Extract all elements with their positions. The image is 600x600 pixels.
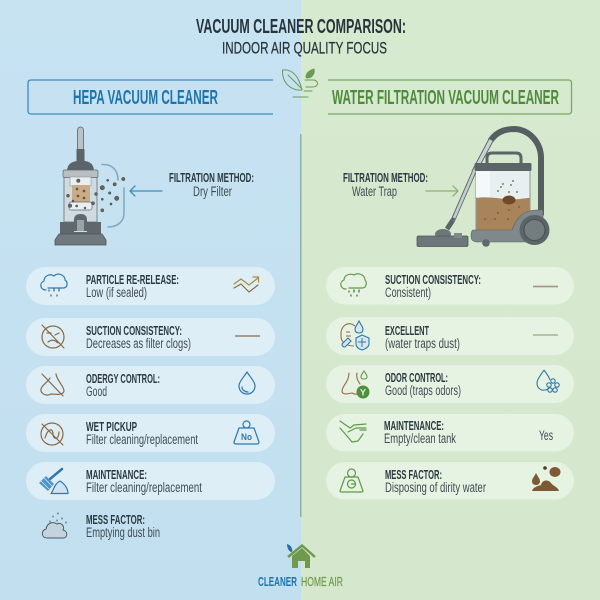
row: water mess factor: MESS FACTOR:	[385, 467, 442, 482]
icon: green dash	[533, 334, 558, 336]
row: HEPA maintenance	[26, 462, 275, 500]
row: water excellent dust capture: (water traps dust)	[385, 336, 460, 351]
icon: green rain cloud	[341, 274, 366, 296]
icon: crossed-out face	[42, 325, 64, 348]
illustration: water filtration canister vacuum	[417, 129, 550, 247]
icon: water drop	[239, 372, 255, 394]
icon: nose with Y badge	[342, 371, 370, 398]
label: HEPA filtration method: Dry Filter	[193, 184, 232, 199]
icon: brush and dustpan	[39, 469, 68, 494]
icon: weight marked No: No	[241, 432, 252, 443]
row: water maintenance: Empty/clean tank	[384, 431, 456, 446]
row: HEPA maintenance: Filter cleaning/replacement	[86, 480, 202, 495]
footer: Cleaner Home Air logo: CLEANER	[258, 574, 297, 589]
row: HEPA wet pickup: Filter cleaning/replacement	[86, 432, 198, 447]
row: HEPA wet pickup	[26, 414, 275, 452]
label: yes: Yes	[539, 428, 553, 443]
icon: face with drop and shield	[341, 321, 369, 350]
row: HEPA suction consistency: Decreases as filter clogs)	[86, 336, 191, 351]
icon: handshake	[340, 421, 366, 442]
row: water mess factor: Disposing of dirity water	[385, 480, 486, 495]
icon: dust cloud	[42, 513, 67, 538]
row: water odor control: ODOR CONTROL:	[385, 370, 448, 385]
icon: house with leaf	[287, 544, 315, 568]
icon: crossed-out nose	[41, 374, 64, 396]
row: HEPA odor control: ODERGY CONTROL:	[86, 371, 160, 386]
heading: HEPA vacuum cleaner: HEPA VACUUM CLEANER	[73, 87, 218, 109]
title	[196, 16, 406, 58]
icon: nose with Y badge: Y	[360, 388, 366, 398]
row: HEPA odor control	[26, 366, 275, 404]
row: HEPA wet pickup: WET PICKUP	[86, 419, 137, 434]
panel: right background	[301, 0, 600, 600]
row: HEPA suction consistency: SUCTION CONSISTENCY:	[86, 323, 182, 338]
icon: central leaf and wind logo	[282, 69, 318, 97]
arrow: HEPA filtration	[130, 186, 162, 196]
row: HEPA mess factor: Emptying dust bin	[86, 525, 160, 540]
row: water suction consistency: SUCTION CONSISTENCY:	[385, 272, 481, 287]
title: INDOOR AIR QUALITY FOCUS	[222, 38, 387, 58]
illustration: HEPA upright vacuum	[55, 127, 125, 245]
icon: trend arrow	[234, 277, 258, 292]
heading: HEPA vacuum cleaner	[28, 80, 273, 114]
label: water filtration method: FILTRATION METHOD:	[343, 170, 428, 185]
title: VACUUM CLEANER COMPARISON:	[196, 16, 406, 38]
row: HEPA particle re-release: PARTICLE RE-RELEASE:	[86, 272, 179, 287]
heading: water filtration vacuum cleaner	[328, 80, 572, 114]
icon: weight marked No	[234, 421, 259, 444]
row: water odor control	[326, 365, 574, 403]
row: water excellent dust capture: EXCELLENT	[385, 323, 429, 338]
row: HEPA mess factor: MESS FACTOR:	[86, 512, 145, 527]
icon: crossed-out wave	[41, 423, 63, 445]
footer: Cleaner Home Air logo	[258, 544, 343, 589]
panel: left background	[0, 0, 301, 600]
row: water excellent dust capture	[326, 317, 574, 355]
icon: drop with flower	[537, 370, 559, 392]
row: HEPA suction consistency	[26, 318, 275, 356]
footer: Cleaner Home Air logo: HOME AIR	[301, 574, 343, 589]
label: water filtration method	[343, 170, 428, 199]
row: HEPA mess factor	[42, 512, 160, 540]
label: HEPA filtration method: FILTRATION METHOD:	[169, 170, 254, 185]
row: HEPA maintenance: MAINTENANCE:	[86, 467, 147, 482]
icon: brown dash	[533, 286, 558, 288]
row: water mess factor	[326, 462, 574, 500]
row: HEPA particle re-release	[26, 267, 275, 305]
icon: dirt pile	[532, 466, 560, 491]
row: water maintenance: MAINTENANCE:	[384, 418, 444, 433]
row: water suction consistency: Consistent)	[385, 285, 431, 300]
row: water odor control: Good (traps odors)	[385, 383, 461, 398]
row: HEPA particle re-release: Low (if sealed)	[86, 285, 147, 300]
row: HEPA odor control: Good	[86, 384, 107, 399]
row: water maintenance	[326, 414, 574, 452]
icon: rain cloud	[41, 274, 67, 296]
icon: green weight with clock	[340, 469, 363, 492]
label: water filtration method: Water Trap	[352, 184, 397, 199]
row: water suction consistency	[326, 267, 574, 304]
arrow: water filtration	[426, 186, 458, 196]
label: HEPA filtration method	[169, 170, 254, 199]
icon: flat dash	[235, 335, 260, 337]
